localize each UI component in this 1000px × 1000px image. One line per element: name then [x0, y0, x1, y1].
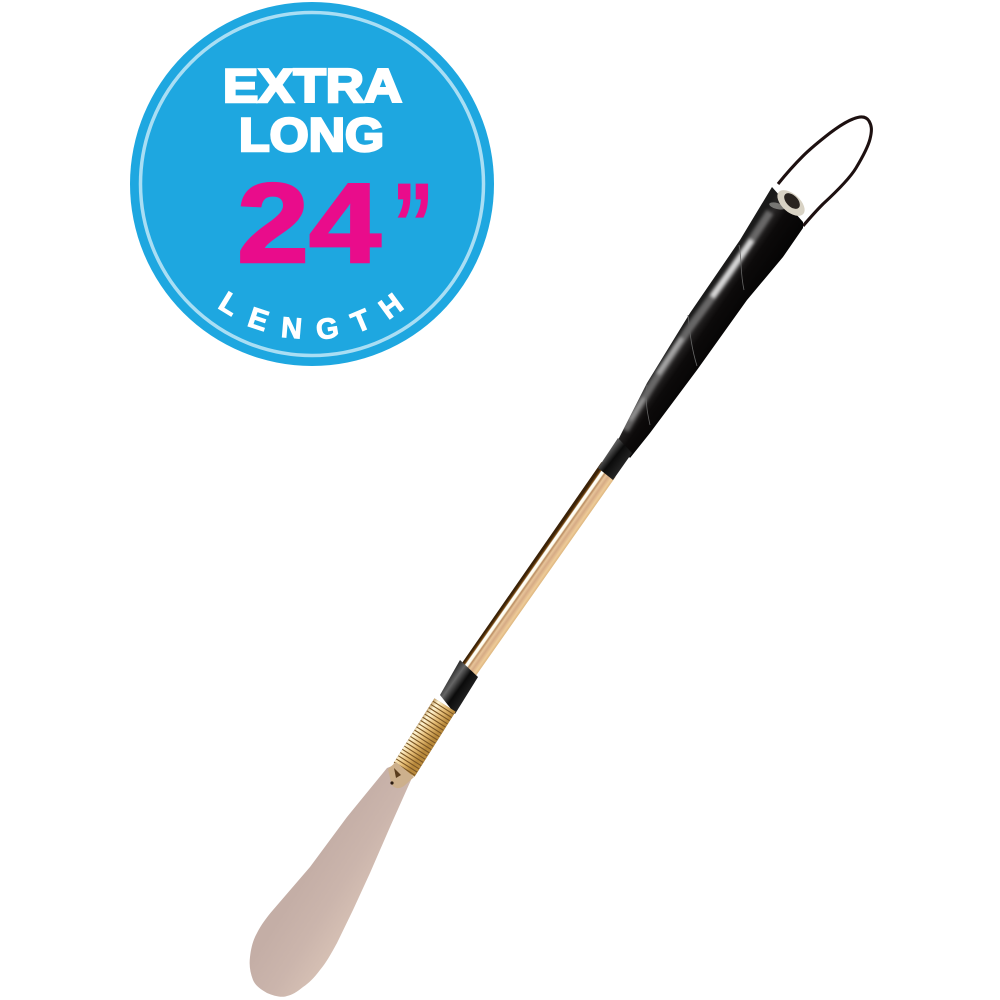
hanging loop	[778, 117, 871, 226]
coil spring	[404, 705, 445, 770]
grip wrap seams	[646, 245, 744, 425]
inch mark: ”	[392, 159, 434, 291]
heading: long: LONG	[239, 108, 384, 161]
gold shaft	[462, 462, 616, 677]
blade mount	[388, 762, 414, 788]
label: length: LENGTH	[218, 290, 404, 340]
lower black collar	[440, 660, 478, 714]
black leather grip	[617, 187, 803, 458]
grip end cap	[768, 185, 809, 221]
badge circle	[130, 2, 494, 366]
badge inner ring	[140, 12, 484, 356]
product: shoehorn	[250, 117, 871, 997]
number: 24: 24	[237, 160, 381, 286]
upper black collar	[598, 438, 632, 480]
badge: extra long 24 inch length	[130, 2, 494, 366]
heading: extra: EXTRA	[223, 59, 402, 112]
grip highlight	[625, 212, 770, 430]
shoehorn blade	[250, 764, 411, 997]
